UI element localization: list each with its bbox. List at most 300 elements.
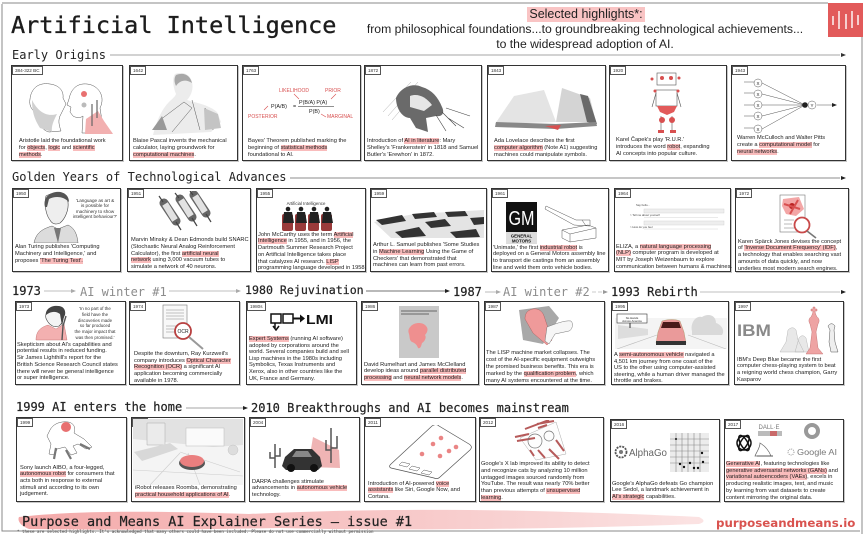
panel: 1974 bbox=[129, 301, 240, 385]
year bbox=[257, 189, 273, 198]
caption bbox=[738, 238, 842, 272]
icon: OCR magnifier bbox=[162, 304, 206, 350]
quote: the major impact that bbox=[74, 329, 116, 334]
subtitle bbox=[367, 22, 803, 50]
quote: 'Language as art & bbox=[76, 198, 114, 203]
chart: Bayes formula: P(B/A) P(A) bbox=[299, 100, 327, 106]
caption: (NLP) computer program is developed at bbox=[616, 250, 719, 256]
caption: a technology that enables searching vast bbox=[738, 252, 841, 258]
caption: Warren McCulloch and Walter Pitts bbox=[737, 135, 825, 141]
caption: on Artificial Intelligence takes place bbox=[258, 252, 346, 258]
caption bbox=[481, 461, 590, 502]
panel: 2004 bbox=[249, 417, 360, 502]
caption: technology. bbox=[252, 492, 281, 498]
panel: 384-322 BC bbox=[11, 65, 123, 161]
quote bbox=[65, 306, 125, 341]
year bbox=[612, 302, 628, 311]
caption: Skepticism about AI's capabilities and bbox=[17, 342, 112, 348]
heading: 2010 Breakthroughs: 2010 Breakthroughs and AI becomes mainstream bbox=[251, 401, 569, 415]
chart: neural network: X bbox=[756, 92, 760, 97]
year: 2017 bbox=[728, 422, 738, 427]
year bbox=[736, 189, 752, 198]
year: 1950 bbox=[16, 191, 26, 196]
caption: Butler's 'Erewhon' in 1872. bbox=[367, 152, 434, 158]
caption: assistants like Siri, Google Now, and bbox=[368, 487, 460, 493]
caption: David Rumelhart and James McClelland bbox=[364, 362, 465, 368]
heading: 1987: 1987 bbox=[453, 285, 482, 299]
caption bbox=[737, 135, 825, 155]
year bbox=[365, 418, 381, 427]
icon: cat image collage bbox=[513, 420, 569, 462]
caption: communication between humans & machines. bbox=[616, 264, 732, 270]
caption: proposes 'The Turing Test'. bbox=[15, 258, 83, 264]
caption: US to the other using computer-assisted bbox=[614, 365, 715, 371]
caption: available in 1978. bbox=[134, 378, 178, 384]
year bbox=[732, 66, 748, 75]
heading: AI winter #1: AI winter #1 bbox=[80, 285, 167, 299]
caption: autonomous robot for consumers that bbox=[20, 471, 115, 477]
year bbox=[132, 418, 148, 427]
panel: 1955 bbox=[256, 188, 366, 272]
caption: Google's AlphaGo defeats Go champion bbox=[612, 480, 713, 486]
caption: ELIZA, a natural language processing bbox=[616, 244, 711, 250]
heading: Early Origins: Early Origins bbox=[12, 48, 106, 62]
caption: practical household applications of AI. bbox=[135, 492, 230, 498]
caption: variational autoencoders (VAEs), excels in bbox=[726, 474, 832, 480]
caption: machines could manipulate symbols. bbox=[494, 152, 587, 158]
quote: so far produced bbox=[80, 323, 110, 328]
year bbox=[130, 302, 146, 311]
caption: introduces the word robot, expanding bbox=[616, 144, 710, 150]
arrow bbox=[366, 289, 450, 293]
year: 2011 bbox=[368, 420, 378, 425]
panel: 1950 bbox=[12, 188, 121, 272]
year bbox=[16, 302, 32, 311]
caption bbox=[368, 480, 460, 501]
caption: processing and neural network models. bbox=[364, 375, 463, 381]
year: 1642 bbox=[133, 68, 143, 73]
icon: Pascal portrait bbox=[152, 73, 221, 135]
caption: by learning from vast datasets to create bbox=[726, 488, 826, 494]
panel: 1959 bbox=[370, 188, 487, 272]
caption: generative adversarial networks (GANs) and bbox=[726, 468, 838, 474]
caption: Ada Lovelace describes the first bbox=[494, 138, 575, 144]
year: 2002 bbox=[135, 420, 145, 425]
icon: conference figures: Artificial Intelligence bbox=[287, 201, 326, 206]
icon: two heads bbox=[30, 83, 113, 134]
year bbox=[488, 66, 504, 75]
caption: Sir James Lighthill's report for the bbox=[17, 355, 101, 361]
timeline arrow bbox=[290, 176, 846, 180]
arrow bbox=[700, 290, 846, 294]
caption: network using 3,000 vacuum tubes to bbox=[131, 257, 225, 263]
caption: create a computational model for bbox=[737, 142, 820, 148]
quote bbox=[73, 198, 117, 219]
icon: semi-autonomous car on road: Across America bbox=[622, 319, 642, 323]
caption bbox=[19, 138, 106, 158]
icon: collapsed machine bbox=[517, 305, 575, 347]
caption bbox=[17, 342, 118, 382]
year bbox=[610, 66, 626, 75]
caption: stimuli and according to its own bbox=[20, 485, 99, 491]
caption: 4,501 km journey from one coast of the bbox=[614, 359, 713, 365]
caption: Blaise Pascal invents the mechanical bbox=[133, 138, 227, 144]
caption: Lisp machines in the 1980s including bbox=[249, 356, 342, 362]
caption bbox=[367, 138, 478, 158]
icon: GM logo: MOTORS bbox=[512, 238, 531, 244]
caption: that catalyzes AI research. LISP bbox=[258, 259, 339, 265]
caption: foundational to AI. bbox=[248, 152, 294, 158]
year: 1843 bbox=[491, 68, 501, 73]
icon: robot bbox=[650, 72, 682, 133]
year: 1980s bbox=[250, 304, 263, 309]
caption bbox=[486, 350, 595, 385]
caption: Xerox, also in other countries like the bbox=[249, 369, 342, 375]
arrow bbox=[169, 289, 241, 293]
caption: 'Unimate,' the first industrial robot is bbox=[493, 244, 583, 250]
caption bbox=[737, 356, 837, 383]
icon: semi-autonomous car on road: No Hands bbox=[626, 316, 639, 320]
caption: for objects, logic and scientific bbox=[19, 145, 95, 151]
caption: Symbolics, Texas Instruments and bbox=[249, 362, 335, 368]
year: 1986 bbox=[365, 304, 375, 309]
arrow bbox=[44, 289, 76, 293]
caption bbox=[373, 242, 480, 268]
year: 1999 bbox=[20, 420, 30, 425]
chart: neural network: Y bbox=[810, 103, 814, 108]
year bbox=[250, 418, 266, 427]
year bbox=[130, 66, 146, 75]
chart: Bayes formula: P(B) bbox=[309, 109, 320, 115]
caption: neural networks. bbox=[737, 149, 779, 155]
caption: AI's strategic capabilities. bbox=[612, 494, 676, 500]
caption: Dartmouth Summer Research Project bbox=[258, 245, 353, 251]
icon: open book bbox=[495, 88, 597, 130]
chart: neural network: X bbox=[756, 81, 760, 86]
chart: neural network bbox=[744, 78, 837, 134]
year: 1943 bbox=[735, 68, 745, 73]
panel: 1920 bbox=[609, 65, 727, 161]
chart: Bayes formula: MARGINAL bbox=[327, 114, 353, 120]
year: 2016 bbox=[614, 422, 624, 427]
caption: adopted by corporations around the bbox=[249, 343, 339, 349]
caption: UK, France and Germany. bbox=[249, 376, 315, 382]
panel: 1763 bbox=[242, 65, 361, 161]
year: 2012 bbox=[483, 420, 493, 425]
caption bbox=[249, 336, 349, 382]
icon: vacuum tubes bbox=[158, 191, 212, 230]
caption: Lee Sedol, a landmark achievement in bbox=[612, 487, 709, 493]
caption bbox=[726, 461, 838, 501]
year bbox=[480, 418, 496, 427]
footer title: Purpose and Means AI Explainer Series – issue #1 bbox=[22, 514, 412, 530]
icon: ELIZA chat form: > Tell me about yourself bbox=[630, 213, 660, 217]
year bbox=[611, 420, 627, 429]
panel: 1961 bbox=[491, 188, 609, 272]
quote: was then promised.' bbox=[76, 335, 114, 340]
panel: 1987 bbox=[484, 301, 605, 385]
caption bbox=[494, 138, 598, 158]
chart: neural network: X bbox=[756, 103, 760, 108]
caption: or super intelligence. bbox=[17, 375, 69, 381]
year bbox=[492, 189, 508, 198]
panel: 2017 bbox=[724, 419, 844, 502]
caption: in Machine Learning Using the Game of bbox=[373, 249, 473, 255]
caption: methods. bbox=[19, 152, 42, 158]
year: 384-322 BC bbox=[15, 68, 40, 73]
caption: MIT by Joseph Weizenbaum to explore bbox=[616, 257, 714, 263]
icon: desert car bbox=[263, 426, 353, 480]
caption: Recognition (OCR) a significant AI bbox=[134, 364, 220, 370]
caption: Alan Turing publishes 'Computing bbox=[15, 244, 100, 250]
panel: 1980s bbox=[246, 301, 357, 385]
year: 1920 bbox=[613, 68, 623, 73]
caption: Checkers' that demonstrated that bbox=[373, 256, 457, 262]
caption: calculator, laying groundwork for bbox=[133, 145, 215, 151]
quote: is possible for bbox=[81, 203, 109, 208]
caption: machines can learn from past errors. bbox=[373, 262, 466, 268]
chart: Bayes formula bbox=[248, 88, 353, 120]
caption: iRobot releases Roomba, demonstrating bbox=[135, 484, 237, 490]
icon: GM logo: GENERAL bbox=[511, 234, 533, 238]
year bbox=[371, 189, 387, 198]
panel: 1972 bbox=[735, 188, 849, 272]
panel: 1964 bbox=[614, 188, 731, 272]
year bbox=[13, 189, 29, 198]
year: 1951 bbox=[131, 191, 141, 196]
arrow bbox=[592, 290, 608, 294]
caption: Introduction of AI-powered voice bbox=[368, 480, 449, 486]
caption: a reigning world chess champion, Garry bbox=[737, 370, 837, 376]
caption: Marvin Minsky & Dean Edmonds build SNARC bbox=[131, 237, 249, 243]
subtitle: from philosophical foundations...to groundbreaking technological achievements... bbox=[367, 22, 803, 36]
quote: discoveries made bbox=[78, 318, 112, 323]
year bbox=[365, 66, 381, 75]
heading: 1980 Rejuvination: 1980 Rejuvination bbox=[245, 283, 364, 297]
caption: Shelley's 'Frankenstein' in 1818 and Samuel bbox=[367, 145, 478, 151]
icon: robot arm bbox=[544, 206, 596, 242]
quote: field have the bbox=[82, 312, 108, 317]
icon: AlphaGo logo bbox=[614, 443, 668, 461]
caption: simulate a network of 40 neurons. bbox=[131, 264, 216, 270]
chart: Bayes formula: LIKELIHOOD bbox=[279, 88, 309, 94]
year bbox=[615, 189, 631, 198]
heading: 1999 AI enters the home: 1999 AI enters the home bbox=[16, 400, 182, 414]
icon: worried woman bbox=[33, 305, 79, 343]
caption bbox=[364, 362, 466, 382]
caption: content mirroring the original data. bbox=[726, 495, 812, 501]
year: 1972 bbox=[739, 191, 749, 196]
chart: Bayes formula: POSTERIOR bbox=[248, 114, 278, 120]
caption: company introduces Optical Character bbox=[134, 358, 231, 364]
caption bbox=[135, 484, 237, 500]
website: purposeandmeans.io bbox=[716, 516, 855, 530]
year bbox=[12, 66, 43, 75]
caption: develop ideas around parallel distributed bbox=[364, 368, 466, 374]
caption: cost of the AI-specific equipment outweighs bbox=[486, 357, 595, 363]
icon: generative AI logos: Google AI bbox=[797, 447, 837, 457]
caption: Aristotle laid the foundational work bbox=[19, 138, 106, 144]
year bbox=[128, 189, 144, 198]
caption: acts both in response to external bbox=[20, 478, 102, 484]
caption bbox=[131, 237, 249, 270]
caption: and recognize cats by analyzing 10 million bbox=[481, 468, 588, 474]
icon: semi-autonomous car on road bbox=[615, 310, 727, 349]
caption: (Stochastic Neural Analog Reinforcement bbox=[131, 244, 235, 250]
panel: 1999 bbox=[16, 417, 127, 502]
caption: application becoming commercially bbox=[134, 371, 222, 377]
caption: computational machines. bbox=[133, 152, 196, 158]
icon: generative AI logos bbox=[733, 422, 841, 462]
subtitle: to the widespread adoption of AI. bbox=[496, 36, 674, 50]
year bbox=[485, 302, 501, 311]
panel: 2002 bbox=[131, 417, 245, 502]
icon: document and magnifier bbox=[780, 194, 816, 238]
icon: Turing portrait bbox=[34, 192, 78, 243]
panel: 1973 bbox=[15, 301, 126, 385]
chart: Bayes formula: PRIOR bbox=[325, 88, 341, 94]
year: 2004 bbox=[253, 420, 263, 425]
quote: intelligent behaviour?' bbox=[73, 214, 117, 219]
heading: Golden Years: Golden Years of Technological Advances bbox=[12, 170, 287, 184]
caption: Kasparov bbox=[737, 377, 761, 383]
caption bbox=[15, 244, 100, 264]
icon: ELIZA chat form bbox=[630, 203, 724, 230]
caption: British Science Research Council states bbox=[17, 362, 118, 368]
chart: neural network: X bbox=[756, 127, 760, 132]
caption bbox=[248, 138, 346, 158]
year bbox=[17, 418, 33, 427]
caption: Expert Systems (running AI software) bbox=[249, 336, 343, 342]
panel: 1951 bbox=[127, 188, 251, 272]
caption: computer algorithm (Note A1) suggesting bbox=[494, 145, 597, 151]
caption: YouTube. The result was nearly 70% better bbox=[481, 481, 590, 487]
caption: underlies most modern search engines. bbox=[738, 266, 838, 272]
caption bbox=[20, 464, 115, 498]
year: 1964 bbox=[618, 191, 628, 196]
caption: line and weld them onto vehicle bodies. bbox=[493, 265, 592, 271]
caption: Sony launch AIBO, a four-legged, bbox=[20, 464, 104, 470]
year: 1763 bbox=[246, 68, 256, 73]
year: 1959 bbox=[374, 191, 384, 196]
caption: world. Several companies build and sell bbox=[249, 349, 349, 355]
caption: steering, while a human driver managed the bbox=[614, 372, 725, 378]
panel: 1943 bbox=[731, 65, 846, 161]
title: Artificial Intelligence bbox=[11, 11, 336, 39]
panel: 1995 bbox=[611, 301, 729, 385]
caption: Calculator), the first artificial neural bbox=[131, 251, 219, 257]
caption: the promised business benefits. This era is bbox=[486, 364, 594, 370]
caption: Machinery and Intelligence,' and bbox=[15, 251, 96, 257]
caption bbox=[612, 480, 713, 501]
year: 1955 bbox=[260, 191, 270, 196]
caption: John McCarthy uses the term Artificial bbox=[258, 232, 353, 238]
icon: robot vacuum in room bbox=[133, 419, 243, 485]
icon: chessboard bbox=[374, 210, 484, 238]
year: 1987 bbox=[488, 304, 498, 309]
caption: many AI systems encountered at the time. bbox=[486, 378, 592, 384]
year: 1872 bbox=[368, 68, 378, 73]
panel: 1642 bbox=[129, 65, 238, 161]
logo bbox=[828, 3, 863, 37]
caption bbox=[258, 232, 366, 271]
icon: IBM logo and chess pieces: IBM bbox=[737, 321, 771, 340]
icon: conference figures bbox=[282, 201, 333, 231]
caption: Bayes' Theorem published marking the bbox=[248, 138, 346, 144]
caption: Introduction of AI in literature: Mary bbox=[367, 138, 455, 144]
caption: judgement. bbox=[20, 491, 48, 497]
heading: AI winter #2: AI winter #2 bbox=[503, 285, 590, 299]
panel: 1843 bbox=[487, 65, 606, 161]
caption: of 'Inverse Document Frequency' (IDF), bbox=[738, 245, 837, 251]
caption: advancements in autonomous vehicle bbox=[252, 485, 347, 491]
year bbox=[243, 66, 259, 75]
caption bbox=[252, 478, 347, 499]
year: 1961 bbox=[495, 191, 505, 196]
icon: OCR magnifier: OCR bbox=[177, 329, 189, 335]
caption bbox=[616, 136, 710, 157]
icon: IBM logo and chess pieces bbox=[737, 305, 842, 357]
panel: 1997 bbox=[734, 301, 844, 385]
panel: 1986 bbox=[361, 301, 479, 385]
caption: Intelligence in 1955, and in 1956, the bbox=[258, 238, 351, 244]
caption: Generative AI, featuring technologies like bbox=[726, 461, 829, 467]
chart: neural network: X bbox=[756, 114, 760, 119]
caption bbox=[493, 244, 606, 271]
panel: 2012 bbox=[479, 417, 604, 502]
arrow bbox=[485, 290, 501, 294]
caption: potential results in reduced funding. bbox=[17, 348, 107, 354]
caption: beginning of statistical methods bbox=[248, 145, 327, 151]
chart: Bayes formula: = bbox=[293, 104, 296, 110]
caption: Despite the downturn, Ray Kurzweil's bbox=[134, 351, 228, 357]
year bbox=[725, 420, 741, 429]
quote: 'In no part of the bbox=[79, 306, 111, 311]
year bbox=[735, 302, 751, 311]
year: 1973 bbox=[19, 304, 29, 309]
icon: LMI logo bbox=[270, 313, 334, 331]
caption bbox=[133, 138, 227, 158]
icon: ELIZA chat form: > How do you feel bbox=[630, 225, 653, 229]
icon: generative AI logos: DALL·E bbox=[758, 425, 780, 431]
caption: The LISP machine market collapses. The bbox=[486, 350, 590, 356]
year: 1974 bbox=[133, 304, 143, 309]
year: 1997 bbox=[738, 304, 748, 309]
heading: 1993 Rebirth: 1993 Rebirth bbox=[611, 285, 698, 299]
caption: learning. bbox=[481, 495, 503, 501]
year bbox=[247, 302, 266, 311]
caption: deployed on a General Motors assembly line bbox=[493, 251, 606, 257]
caption: amounts of data quickly, and now bbox=[738, 259, 822, 265]
caption: than previous attempts of unsupervised bbox=[481, 488, 580, 494]
caption: to transport die castings from an assembly bbox=[493, 258, 600, 264]
caption: marked by the qualification problem, which bbox=[486, 371, 594, 377]
caption: Karel Čapek's play 'R.U.R.' bbox=[616, 137, 684, 143]
highlight label: Selected highlights*: bbox=[529, 7, 643, 21]
chart: Bayes formula: P(A/B) bbox=[271, 104, 287, 110]
caption: producing realistic images, text, and music bbox=[726, 481, 833, 487]
heading: 1973: 1973 bbox=[12, 284, 41, 298]
icon: go board bbox=[670, 433, 709, 472]
icon: ELIZA chat form: Say hello... bbox=[636, 203, 650, 207]
icon: phone with apps bbox=[389, 425, 474, 481]
quote: machinery to show bbox=[76, 209, 114, 214]
icon: GM logo bbox=[506, 202, 537, 244]
caption: untagged images sourced randomly from bbox=[481, 475, 584, 481]
caption: throttle and brakes. bbox=[614, 378, 663, 384]
footer brush stroke bbox=[15, 506, 705, 531]
icon: book cover with brain bbox=[399, 306, 439, 358]
